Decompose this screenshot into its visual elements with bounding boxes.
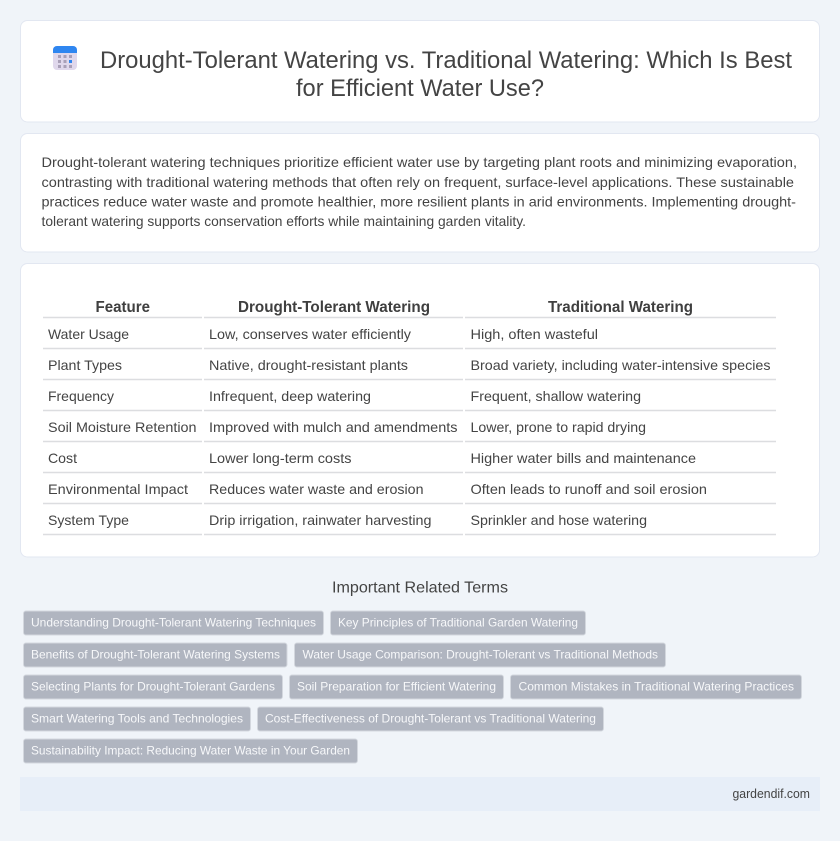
title: [100, 47, 792, 102]
tag: [330, 611, 586, 635]
row: frequency: Frequent, shallow watering: [470, 388, 641, 404]
tag: Smart Watering Tools and Technologies: [31, 712, 243, 726]
tag: [24, 675, 282, 699]
tag: Selecting Plants for Drought-Tolerant Gardens: [31, 680, 275, 694]
row: environmental impact: Reduces water waste and erosion: [209, 481, 424, 497]
icon: calendar: [53, 46, 77, 70]
tag: Water Usage Comparison: Drought-Tolerant vs Traditional Methods: [302, 648, 658, 662]
row: system type: [48, 512, 647, 528]
footer: [20, 777, 820, 811]
row: water usage: [48, 326, 598, 342]
row: system type: Sprinkler and hose watering: [470, 512, 647, 528]
panel: introduction: [20, 134, 820, 252]
text block: introduction paragraph: contrasting with traditional watering methods that often rely on frequent, surface-level applications. These sustainable: [42, 174, 794, 190]
row: environmental impact: Often leads to runoff and soil erosion: [470, 481, 707, 497]
row: soil moisture retention: Soil Moisture Retention: [48, 419, 196, 435]
table header: Drought-Tolerant Watering: [238, 299, 430, 316]
table header: Feature: [96, 299, 150, 316]
text block: introduction paragraph: practices reduce water waste and promote healthier, more resilient plants in arid environments. Implementing drought-: [42, 194, 796, 210]
row: water usage: Water Usage: [48, 326, 129, 342]
title: for Efficient Water Use?: [296, 75, 544, 102]
tag: Soil Preparation for Efficient Watering: [297, 680, 496, 694]
row: environmental impact: Environmental Impact: [48, 481, 188, 497]
tag: Benefits of Drought-Tolerant Watering Systems: [31, 648, 280, 662]
tag: Key Principles of Traditional Garden Watering: [338, 616, 578, 630]
tag: [294, 643, 666, 667]
table header: [96, 299, 693, 316]
tag: [24, 707, 250, 731]
title: Drought-Tolerant Watering vs. Traditional Watering: Which Is Best: [100, 47, 792, 74]
footer source text: gardendif.com: [732, 787, 810, 801]
tag: [24, 739, 358, 763]
row: system type: System Type: [48, 512, 129, 528]
tag: [290, 675, 504, 699]
panel: comparison table: [20, 264, 820, 557]
row: water usage: Low, conserves water efficiently: [209, 326, 411, 342]
row: plant types: [48, 357, 770, 373]
tag: [510, 675, 802, 699]
tag: [24, 643, 287, 667]
tag: Understanding Drought-Tolerant Watering Techniques: [31, 616, 316, 630]
row: frequency: Infrequent, deep watering: [209, 388, 371, 404]
heading: related terms: Important Related Terms: [332, 580, 508, 596]
tag: [258, 707, 604, 731]
row: soil moisture retention: Improved with mulch and amendments: [209, 419, 458, 435]
row: environmental impact: [48, 481, 707, 497]
tag: Sustainability Impact: Reducing Water Waste in Your Garden: [31, 744, 350, 758]
tag: Common Mistakes in Traditional Watering Practices: [518, 680, 794, 694]
row: plant types: Broad variety, including water-intensive species: [470, 357, 770, 373]
table header: Traditional Watering: [548, 299, 693, 316]
row: cost: Cost: [48, 450, 77, 466]
row: system type: Drip irrigation, rainwater harvesting: [209, 512, 432, 528]
row: plant types: Plant Types: [48, 357, 122, 373]
row: cost: [48, 450, 696, 466]
row: soil moisture retention: Lower, prone to rapid drying: [470, 419, 646, 435]
row: plant types: Native, drought-resistant plants: [209, 357, 408, 373]
row: frequency: [48, 388, 641, 404]
row: frequency: Frequency: [48, 388, 114, 404]
row: soil moisture retention: [48, 419, 646, 435]
row: cost: Lower long-term costs: [209, 450, 352, 466]
panel: header: [20, 20, 820, 122]
row: water usage: High, often wasteful: [470, 326, 598, 342]
related term tags: [24, 611, 802, 763]
tag: [24, 611, 324, 635]
text block: introduction paragraph: tolerant watering supports conservation efforts while maintaining garden vitality.: [42, 213, 526, 229]
tag: Cost-Effectiveness of Drought-Tolerant vs Traditional Watering: [265, 712, 596, 726]
row: cost: Higher water bills and maintenance: [470, 450, 696, 466]
text block: introduction paragraph: [42, 154, 797, 229]
text block: introduction paragraph: Drought-tolerant watering techniques prioritize efficient water use by targeting plant roots and minimizing evaporation,: [42, 154, 797, 170]
